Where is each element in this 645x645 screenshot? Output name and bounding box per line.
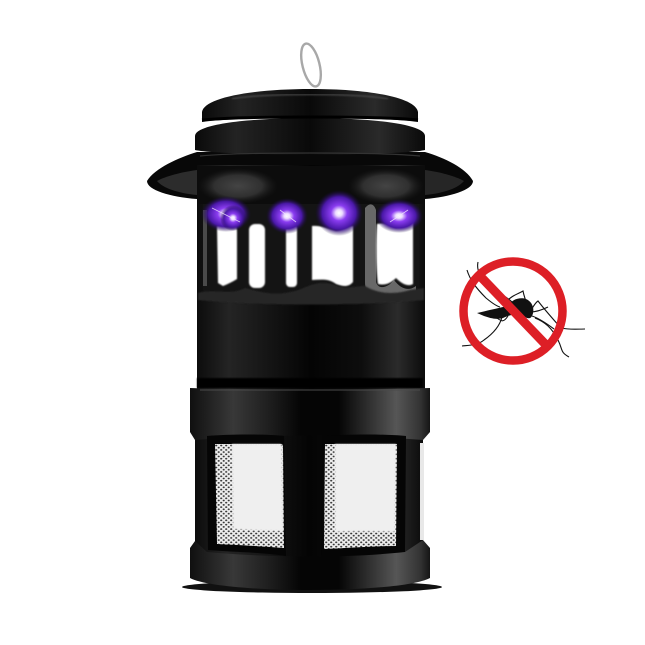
lid highlight [232, 94, 388, 99]
right mesh window [321, 434, 406, 558]
lower collar [190, 388, 430, 440]
prohibition ring [464, 262, 562, 360]
window 1 [217, 223, 237, 286]
icon: no mosquito sign [462, 262, 585, 360]
window 2 [249, 224, 265, 288]
mid section [195, 430, 423, 565]
purple lights [201, 190, 423, 236]
brim underside left [157, 170, 197, 195]
prohibition slash [481, 277, 548, 347]
lamp product [147, 89, 473, 593]
side sliver [420, 443, 424, 540]
window 5 [376, 222, 413, 285]
left mesh window [207, 434, 286, 556]
collar shadow [197, 378, 423, 388]
brim underside right [425, 170, 464, 195]
lid seam [202, 117, 418, 120]
inner grey ribs [203, 204, 419, 296]
lower lid tier [195, 118, 425, 154]
brim [147, 152, 473, 199]
upper lid tier [202, 89, 418, 122]
hanging ring [297, 42, 325, 88]
body shoulder shading [198, 166, 424, 204]
bottom collar [190, 540, 430, 590]
mosquito [462, 262, 585, 357]
window slot band [203, 204, 419, 296]
window 3 [286, 225, 297, 287]
brim highlight [200, 153, 420, 156]
window 4 [312, 226, 353, 286]
collar highlight [200, 389, 420, 391]
base shadow [182, 581, 442, 593]
wavy band below windows [198, 283, 424, 304]
body upper cylinder [197, 165, 425, 390]
